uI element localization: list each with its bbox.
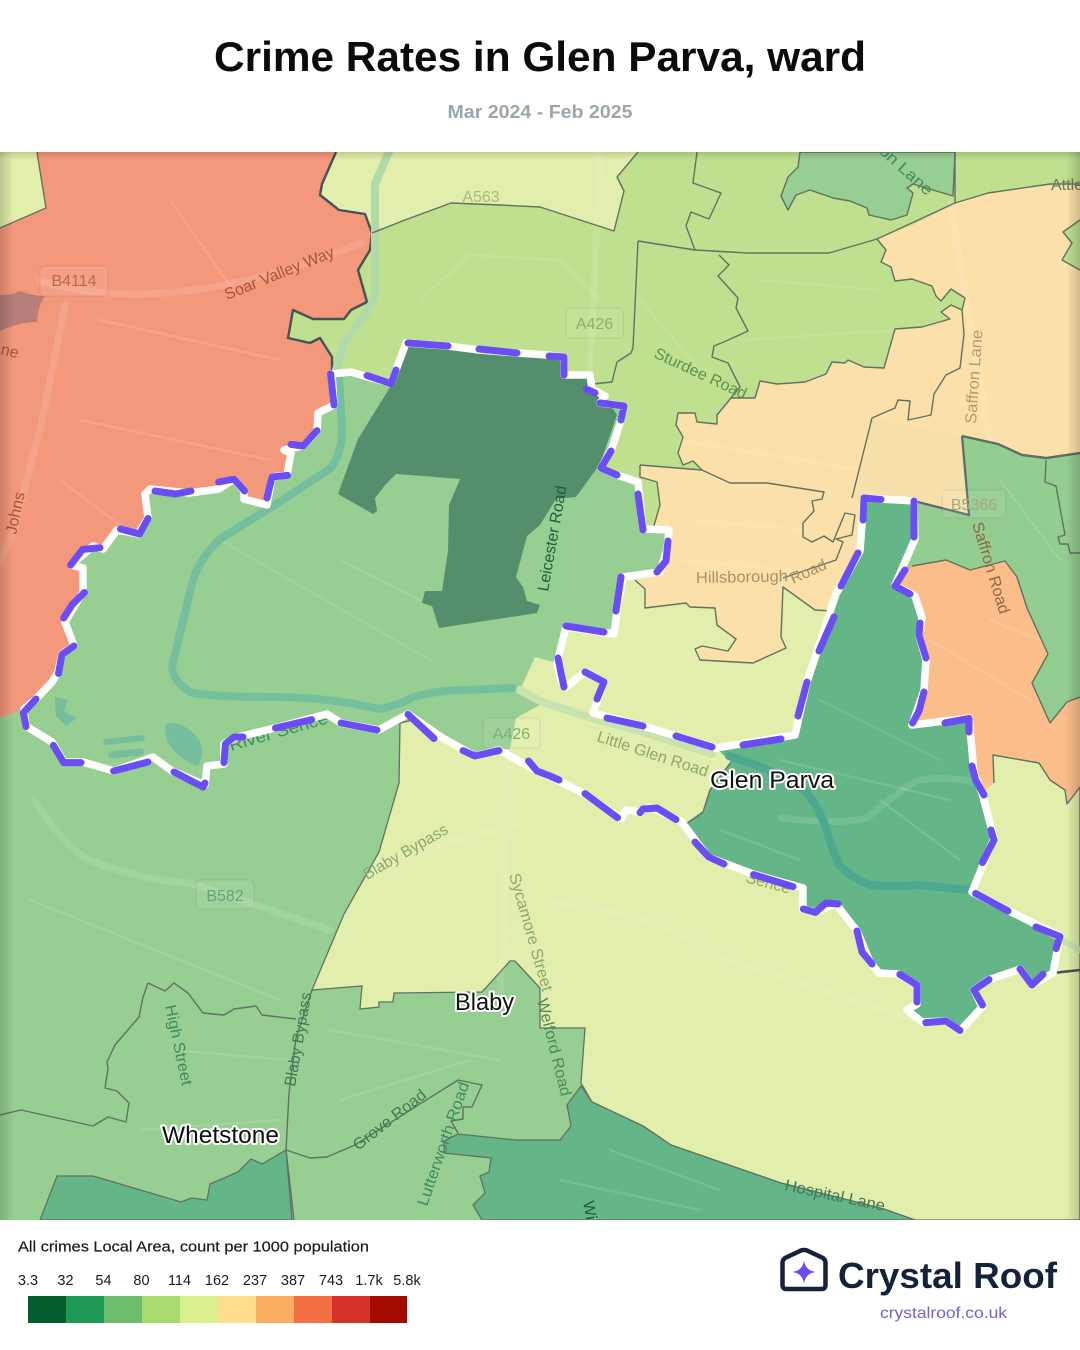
road labels: Road (788, 557, 829, 588)
road shields: A426 (493, 726, 530, 743)
legend tick labels: 32 (57, 1273, 74, 1289)
area: ward western green part (280, 376, 668, 752)
river labels under ward boundary (227, 710, 792, 898)
road labels: Hillsborough (696, 568, 788, 587)
river labels under ward boundary: Sence (744, 869, 792, 898)
road labels: Welford Road (533, 997, 574, 1098)
road labels: Hospital Lane (783, 1177, 887, 1215)
road labels: Saffron Road (968, 520, 1012, 616)
legend colour scale (28, 1296, 407, 1323)
area: green east district (895, 436, 1080, 723)
road labels: Grove Road (350, 1087, 430, 1154)
road labels: Lutterworth Road (415, 1080, 473, 1208)
area: darkest green low-crime block (338, 344, 617, 628)
road labels: Johns (3, 491, 29, 536)
area: teal south-west district (40, 1150, 292, 1220)
road labels: Blaby Bypass (282, 991, 315, 1088)
legend tick labels: 5.8k (393, 1273, 421, 1289)
legend tick labels: 743 (319, 1273, 343, 1289)
road labels: Saffron Lane (963, 329, 987, 424)
place labels: Glen Parva (710, 767, 835, 794)
road labels: Sturdee Road (651, 345, 749, 403)
area: mid green north (781, 152, 955, 220)
legend (18, 1238, 421, 1323)
area: lime south (312, 560, 1080, 1220)
area: peach district (635, 184, 1080, 663)
website link text: crystalroof.co.uk (880, 1305, 1008, 1322)
salmon district border (288, 152, 372, 374)
ward boundary: purple dashes (23, 343, 1060, 1030)
area: teal south district (444, 1086, 915, 1220)
road shields: A563 (462, 189, 500, 206)
area: high-crime salmon district (0, 152, 372, 718)
legend tick labels: 237 (243, 1273, 267, 1289)
place labels (162, 767, 835, 1149)
road labels: Soar Valley Way (222, 244, 337, 304)
legend tick labels: 3.3 (18, 1273, 38, 1289)
road labels: Little Glen Road (595, 729, 710, 781)
place labels: Whetstone (162, 1122, 279, 1149)
road shields (40, 189, 1006, 909)
river labels under ward boundary: River Sence (227, 710, 330, 755)
road labels: Wi (579, 1200, 599, 1221)
ward boundary: white casing (24, 343, 1060, 1031)
area: ward eastern teal part (686, 498, 1060, 1031)
legend tick labels: 54 (95, 1273, 112, 1289)
district boundary lines (0, 152, 1080, 1220)
legend tick labels: 1.7k (355, 1273, 383, 1289)
place labels: Blaby (455, 989, 514, 1016)
legend tick labels: 387 (281, 1273, 305, 1289)
road labels: Blaby Bypass (360, 821, 451, 883)
title: Crime Rates in Glen Parva, ward (214, 33, 866, 80)
road labels: High Street (161, 1003, 195, 1088)
area: orange district (895, 560, 1080, 804)
river Sence (172, 152, 1080, 973)
ponds (55, 697, 202, 766)
map panel (0, 142, 1080, 1221)
road network (0, 152, 1060, 1210)
road labels (0, 142, 1080, 1221)
peach district patch (852, 418, 969, 512)
legend tick labels (18, 1273, 421, 1289)
legend tick labels: 162 (205, 1273, 229, 1289)
legend tick labels: 80 (133, 1273, 150, 1289)
road labels: Leicester Road (535, 484, 571, 593)
area: pond in salmon district (0, 291, 45, 331)
road shields: B582 (206, 888, 244, 905)
road shields: A426 (576, 316, 613, 333)
subtitle: date range: Mar 2024 - Feb 2025 (448, 102, 632, 122)
logo wordmark: Crystal Roof (838, 1255, 1058, 1296)
road labels: on Lane (875, 142, 936, 199)
road shields: B4114 (51, 273, 97, 290)
area: lime north band (320, 152, 638, 233)
road shields: B5366 (951, 497, 997, 514)
area: lime north-west corner (0, 152, 46, 228)
logo: Crystal Roof (782, 1250, 1058, 1322)
icon: house with star (782, 1250, 826, 1289)
legend title: All crimes Local Area, count per 1000 population (18, 1238, 369, 1256)
road labels: Sycamore Street (505, 871, 555, 994)
legend tick labels: 114 (168, 1273, 191, 1289)
